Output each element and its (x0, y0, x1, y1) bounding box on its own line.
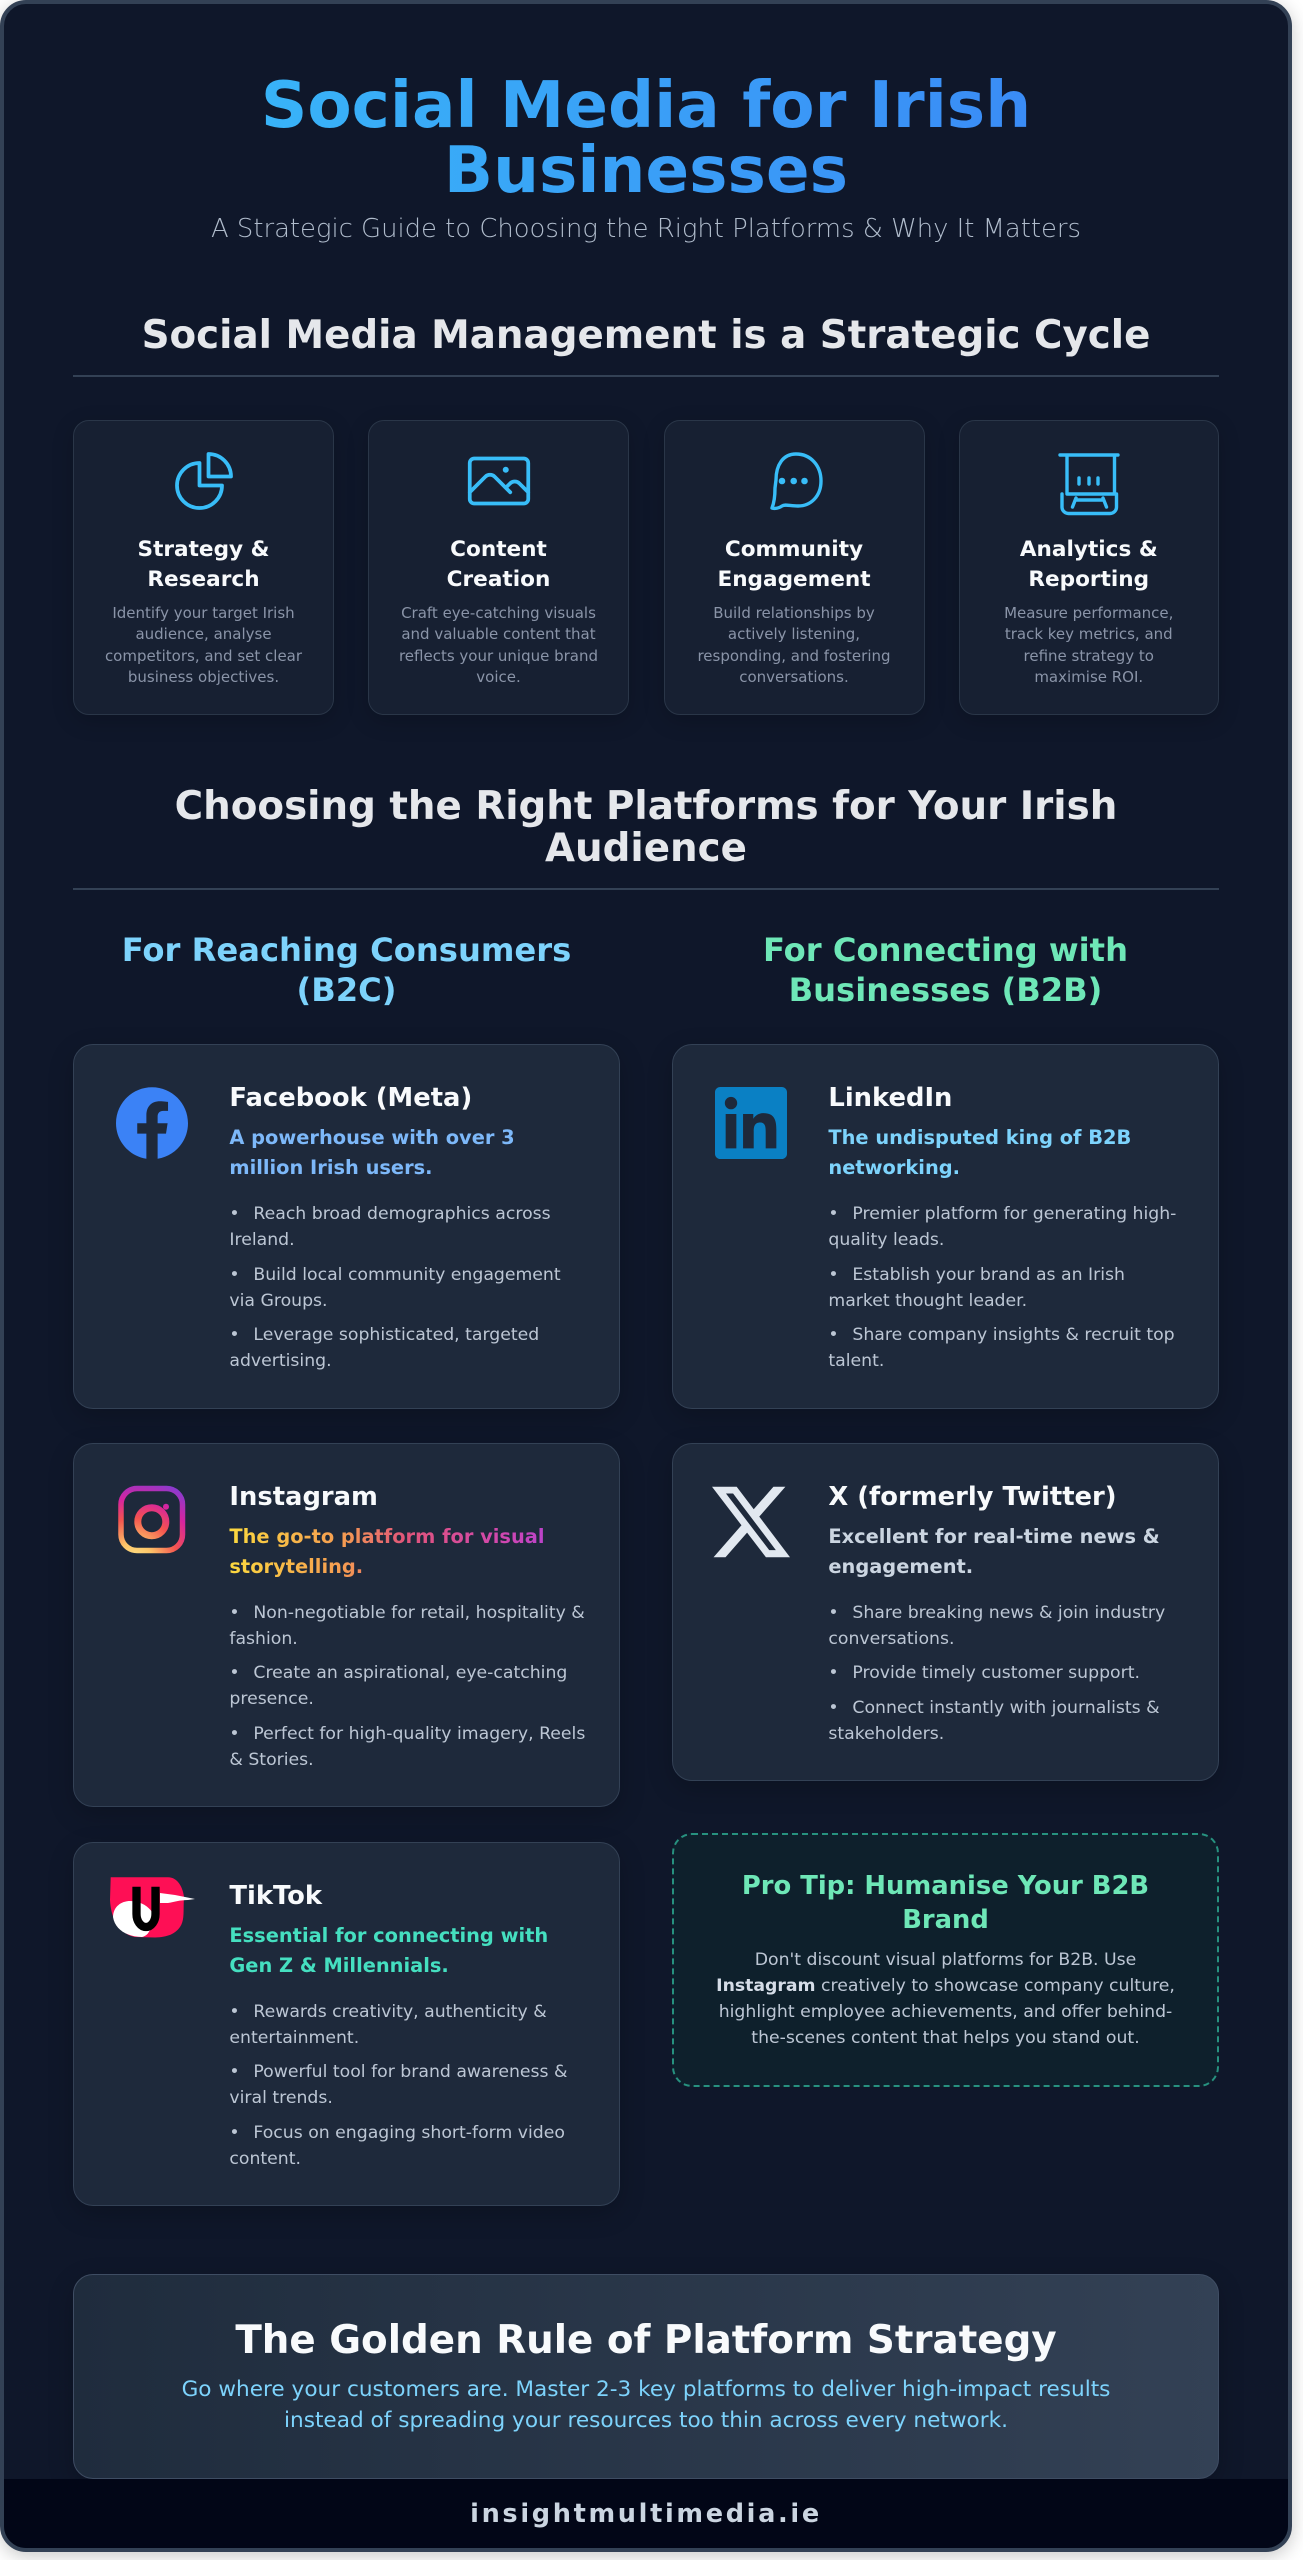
step description: Build relationships by (713, 604, 875, 622)
LinkedIn text: Establish your brand as an Irish (852, 1265, 1125, 1285)
panel: TikTok (73, 1842, 620, 2206)
X text (828, 1482, 1165, 1744)
column heading: B2B: For Connecting with (763, 931, 1128, 969)
Facebook text: • (229, 1325, 240, 1345)
step description: responding, and fostering (697, 647, 891, 665)
TikTok text: Rewards creativity, authenticity & (253, 2002, 547, 2022)
Instagram text: Non-negotiable for retail, hospitality & (253, 1602, 585, 1622)
X text: • (828, 1698, 839, 1718)
Instagram text: Instagram (229, 1482, 378, 1512)
Facebook text: Facebook (Meta) (229, 1083, 472, 1113)
Facebook text: • (229, 1265, 240, 1285)
panel: content creation (368, 420, 629, 715)
Facebook text: Leverage sophisticated, targeted (253, 1325, 539, 1345)
footer website: insightmultimedia.ie (470, 2499, 822, 2529)
X text: Provide timely customer support. (852, 1663, 1140, 1683)
step title: Engagement (717, 566, 871, 592)
step title: Content (450, 536, 547, 562)
Facebook text: million Irish users. (229, 1156, 433, 1179)
subtitle: A Strategic Guide to Choosing the Right Platforms & Why It Matters (211, 214, 1081, 244)
Facebook text: advertising. (229, 1351, 332, 1371)
icon: pie chart (175, 452, 233, 510)
X text: X (formerly Twitter) (828, 1482, 1117, 1512)
Instagram text: • (229, 1602, 240, 1622)
step description (399, 604, 598, 686)
Instagram text: Perfect for high-quality imagery, Reels (253, 1724, 585, 1744)
TikTok text: Focus on engaging short-form video (253, 2123, 565, 2143)
step description (105, 604, 302, 686)
LinkedIn text: Premier platform for generating high- (852, 1204, 1176, 1224)
pro tip heading: Pro Tip: Humanise Your B2B (742, 1871, 1149, 1901)
step description (697, 604, 891, 686)
TikTok text: Gen Z & Millennials. (229, 1954, 449, 1976)
panel: community engagement (664, 420, 924, 715)
Facebook text: A powerhouse with over 3 (229, 1126, 515, 1149)
icon: chat bubble (770, 452, 823, 510)
LinkedIn text: quality leads. (828, 1230, 944, 1250)
Facebook text (229, 1083, 561, 1371)
step description: maximise ROI. (1034, 668, 1143, 686)
Facebook text: via Groups. (229, 1291, 328, 1311)
step title: Community (725, 536, 863, 562)
Instagram text: • (229, 1724, 240, 1744)
panel: strategy and research (73, 420, 334, 715)
Instagram text: & Stories. (229, 1750, 314, 1770)
column heading: B2C (122, 931, 571, 1008)
step description: competitors, and set clear (105, 647, 302, 665)
LinkedIn text: • (828, 1265, 839, 1285)
footer (4, 2479, 1288, 2548)
panel: Facebook (73, 1044, 620, 1409)
X text: stakeholders. (828, 1724, 944, 1744)
LinkedIn text: talent. (828, 1351, 884, 1371)
LinkedIn text: • (828, 1325, 839, 1345)
Facebook text: Build local community engagement (253, 1265, 561, 1285)
LinkedIn text: The undisputed king of B2B (828, 1126, 1131, 1149)
X text: Connect instantly with journalists & (852, 1698, 1160, 1718)
step title: Creation (447, 566, 550, 592)
icon: Instagram (118, 1486, 186, 1554)
heading: strategic cycle: Social Media Management is a Strategic Cycle (142, 313, 1150, 358)
title (73, 72, 1219, 202)
step description: Craft eye-catching visuals (401, 604, 596, 622)
callout: pro tip (672, 1833, 1219, 2087)
golden rule text (182, 2377, 1110, 2433)
golden rule text: instead of spreading your resources too thin across every network. (284, 2408, 1008, 2433)
pro tip text: the-scenes content that helps you stand out. (751, 2028, 1140, 2048)
Instagram text: storytelling. (229, 1554, 363, 1578)
Instagram text: presence. (229, 1689, 314, 1709)
panel: Instagram (73, 1443, 620, 1807)
icon: Facebook (116, 1087, 188, 1159)
LinkedIn text: networking. (828, 1156, 960, 1179)
LinkedIn text: LinkedIn (828, 1083, 952, 1113)
Instagram text: Create an aspirational, eye-catching (253, 1663, 567, 1683)
LinkedIn text: market thought leader. (828, 1291, 1027, 1311)
heading: choosing platforms (175, 784, 1117, 870)
icon: LinkedIn (715, 1087, 787, 1159)
pro tip text: highlight employee achievements, and offer behind- (719, 2002, 1172, 2022)
LinkedIn text: Share company insights & recruit top (852, 1325, 1175, 1345)
step description (1004, 604, 1173, 686)
pro tip text: Don't discount visual platforms for B2B. Use (755, 1950, 1136, 1970)
icon: TikTok (110, 1877, 195, 1938)
TikTok text: • (229, 2002, 240, 2022)
heading: choosing platforms: Choosing the Right Platforms for Your Irish (175, 784, 1117, 828)
X text: • (828, 1663, 839, 1683)
panel: X (672, 1443, 1219, 1781)
pro tip heading (742, 1871, 1149, 1935)
step description: Measure performance, (1004, 604, 1173, 622)
step title (138, 536, 269, 592)
step title: Strategy & (138, 536, 269, 562)
step description: voice. (476, 668, 521, 686)
step description: track key metrics, and (1005, 625, 1173, 643)
LinkedIn text: • (828, 1204, 839, 1224)
step title: Research (147, 566, 260, 592)
Instagram text: • (229, 1663, 240, 1683)
column heading: B2C: For Reaching Consumers (122, 931, 571, 969)
step title: Analytics & (1020, 536, 1158, 562)
TikTok text: • (229, 2123, 240, 2143)
pro tip text (716, 1950, 1175, 2048)
title: Businesses (444, 132, 848, 208)
X text: conversations. (828, 1628, 954, 1648)
pro tip heading: Brand (902, 1905, 989, 1935)
panel: golden rule (73, 2274, 1219, 2479)
TikTok text: Powerful tool for brand awareness & (253, 2062, 567, 2082)
TikTok text (229, 1880, 567, 2169)
Facebook text: Ireland. (229, 1230, 295, 1250)
TikTok text: viral trends. (229, 2088, 333, 2108)
golden rule heading: The Golden Rule of Platform Strategy (235, 2318, 1057, 2362)
Instagram text: fashion. (229, 1628, 298, 1648)
X text: engagement. (828, 1554, 973, 1578)
Instagram text (229, 1482, 585, 1770)
panel: analytics and reporting (958, 420, 1219, 715)
TikTok text: content. (229, 2149, 301, 2169)
column heading: B2B: Businesses (B2B) (789, 970, 1102, 1008)
Instagram text: The go-to platform for visual (229, 1524, 545, 1548)
step description: Identify your target Irish (112, 604, 295, 622)
pro tip text: Instagram creatively to showcase company culture, (716, 1976, 1175, 1996)
step title (717, 536, 871, 592)
Facebook text: • (229, 1204, 240, 1224)
X text: • (828, 1602, 839, 1622)
TikTok text: • (229, 2062, 240, 2082)
step description: refine strategy to (1024, 647, 1154, 665)
LinkedIn text (828, 1083, 1176, 1371)
icon: X (712, 1486, 790, 1558)
heading: choosing platforms: Audience (545, 826, 747, 870)
icon: picture (468, 456, 530, 506)
step description: business objectives. (128, 668, 279, 686)
step description: actively listening, (728, 625, 860, 643)
TikTok text: entertainment. (229, 2028, 359, 2048)
icon: analytics board (1058, 453, 1120, 516)
step title (447, 536, 550, 592)
step description: reflects your unique brand (399, 647, 598, 665)
step title: Reporting (1028, 566, 1149, 592)
step title (1020, 536, 1158, 592)
panel: LinkedIn (672, 1044, 1219, 1409)
X text: Share breaking news & join industry (852, 1602, 1165, 1622)
column heading: B2B (763, 931, 1128, 1008)
TikTok text: Essential for connecting with (229, 1924, 548, 1946)
title: Social Media for Irish (261, 68, 1031, 142)
TikTok text: TikTok (229, 1880, 322, 1910)
step description: conversations. (739, 668, 849, 686)
X text: Excellent for real-time news & (828, 1524, 1160, 1548)
golden rule text: Go where your customers are. Master 2-3 key platforms to deliver high-impact results (182, 2377, 1110, 2402)
step description: and valuable content that (401, 625, 596, 643)
column heading: B2C: (B2C) (296, 970, 396, 1008)
step description: audience, analyse (135, 625, 272, 643)
Facebook text: Reach broad demographics across (253, 1204, 551, 1224)
